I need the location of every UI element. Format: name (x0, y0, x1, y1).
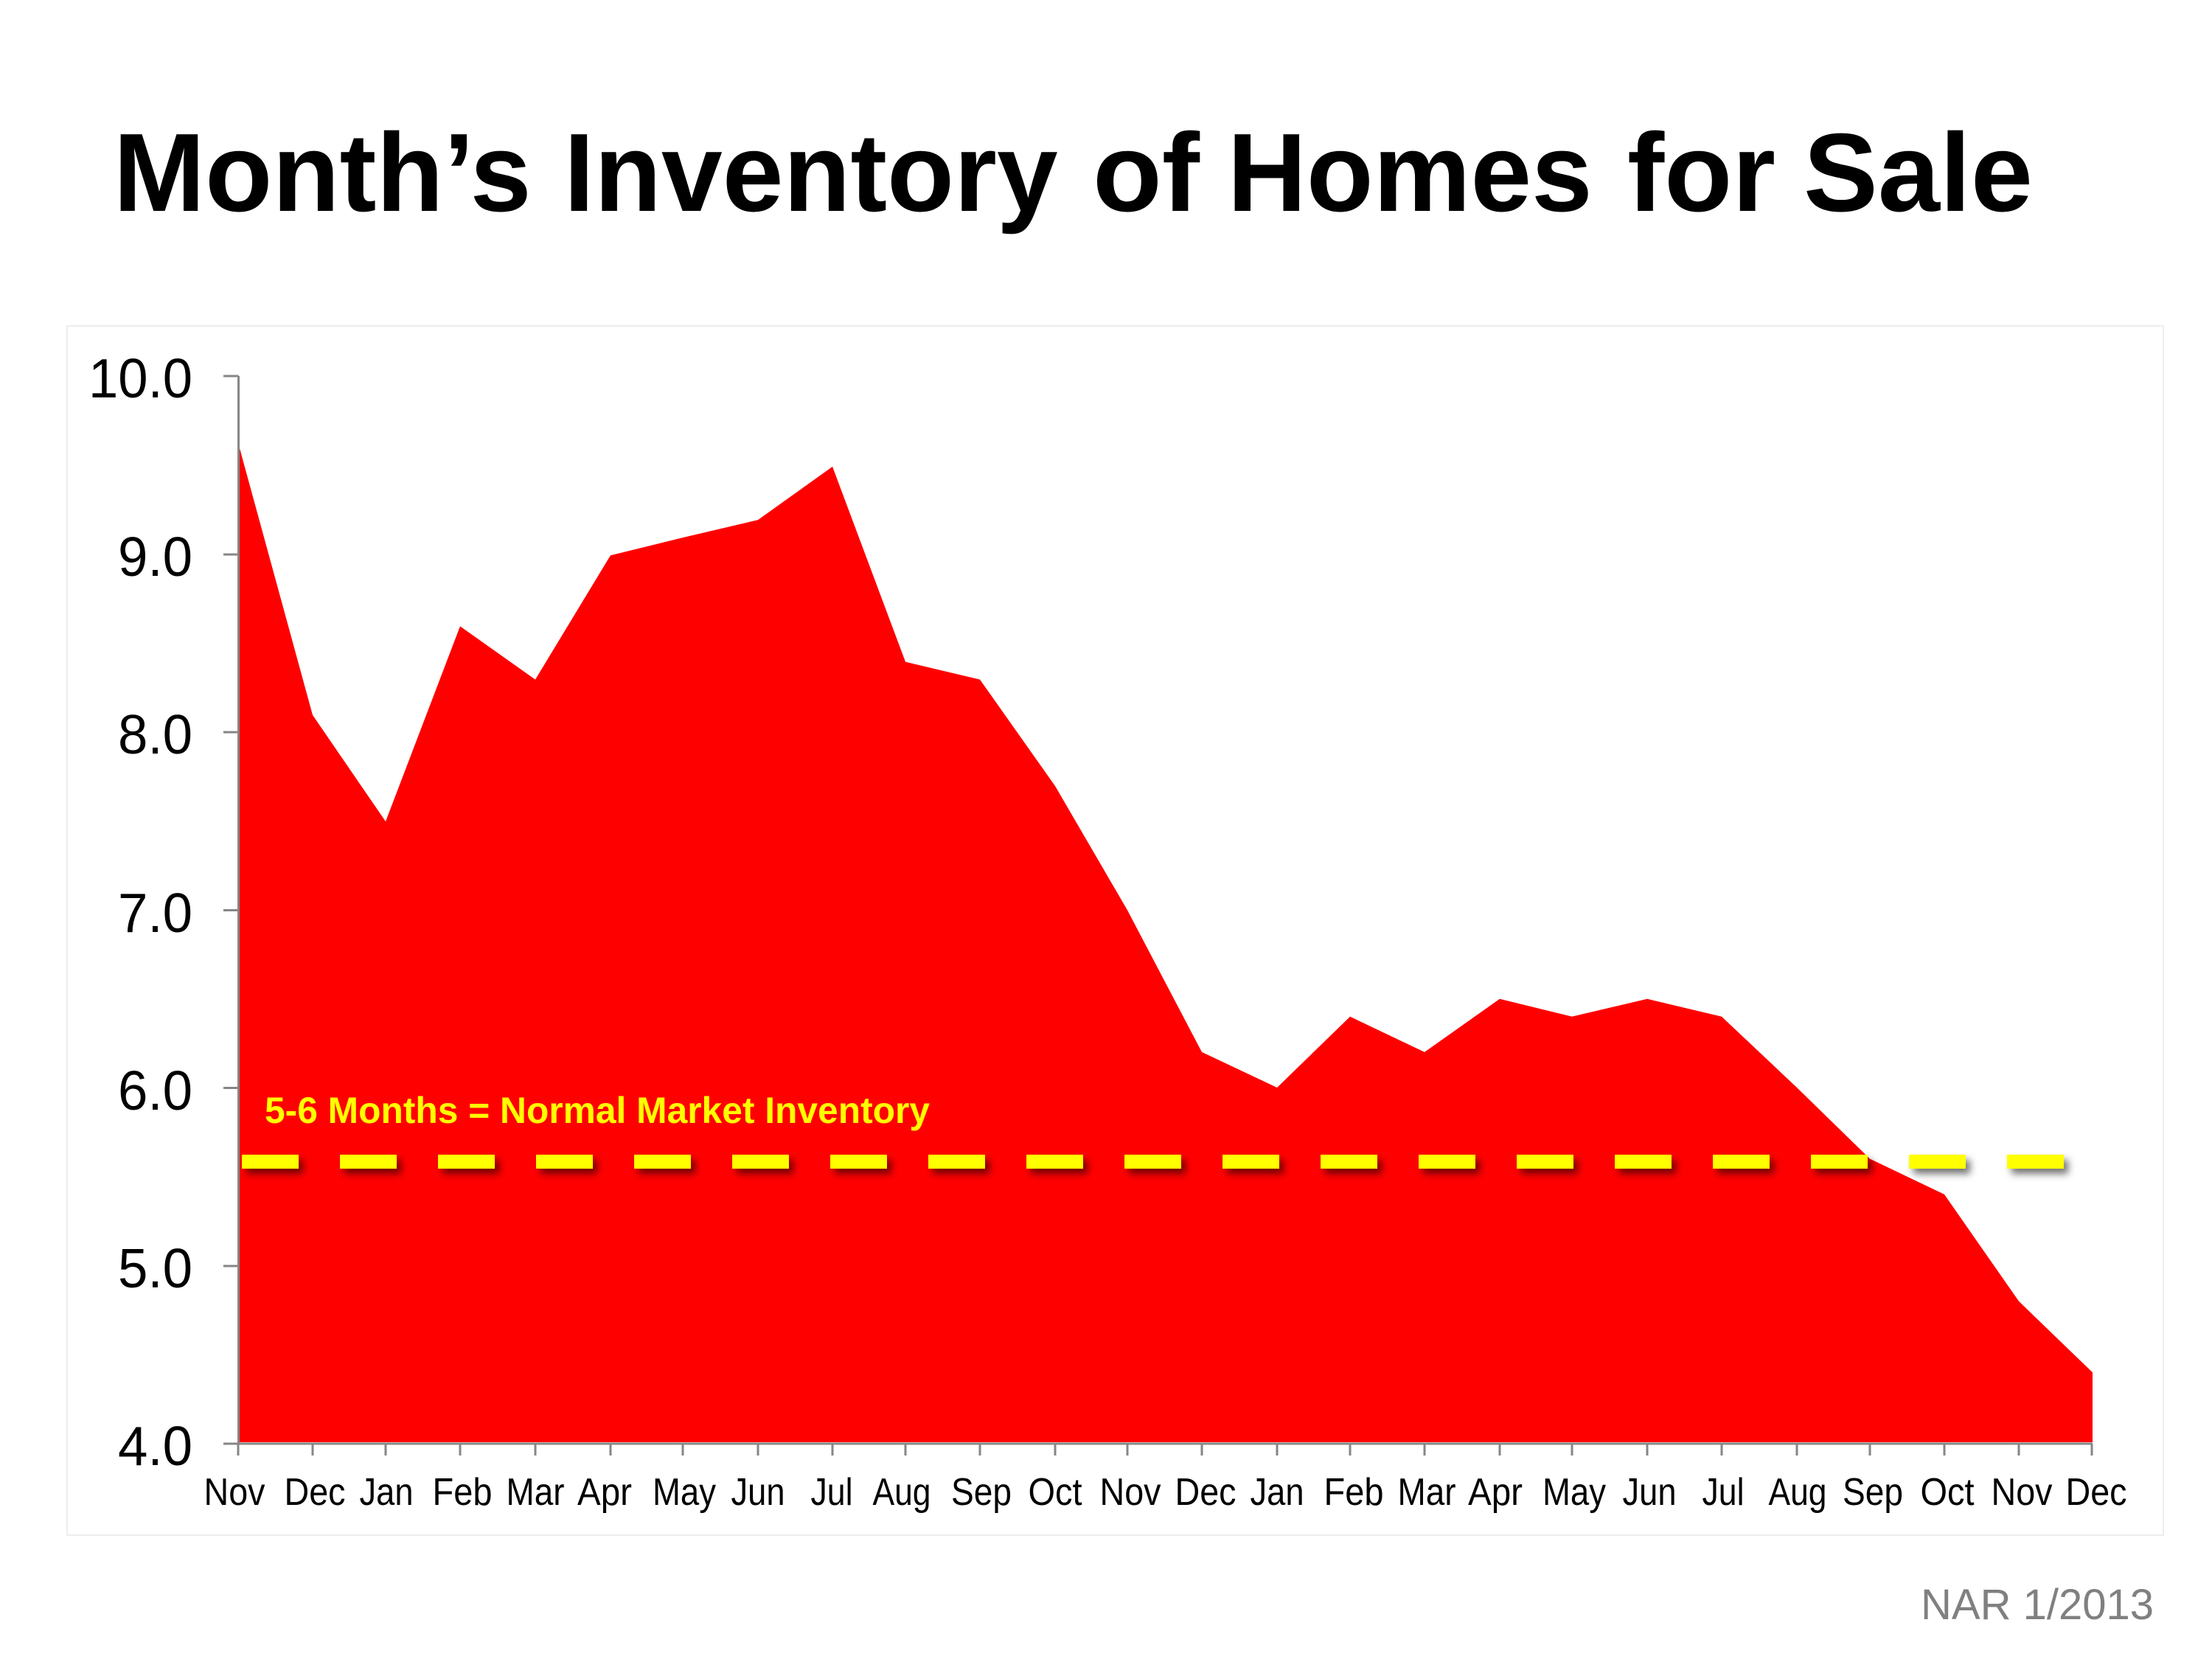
x axis (223, 1444, 2093, 1455)
y axis labels: 5.0 (118, 1237, 192, 1299)
callout: normal market inventory: 5-6 Months = Normal Market Inventory (265, 1090, 930, 1131)
x axis labels: Feb (1324, 1471, 1383, 1514)
x axis labels: Jan (1251, 1471, 1304, 1514)
x axis labels: May (1543, 1471, 1606, 1514)
title (114, 110, 2033, 234)
y axis (223, 376, 239, 1444)
x axis labels: Nov (1100, 1471, 1161, 1514)
x axis labels: Dec (1175, 1471, 1236, 1514)
x axis labels: Oct (1028, 1471, 1082, 1514)
y axis labels: 7.0 (118, 882, 192, 944)
panel: chart frame (67, 326, 2163, 1535)
dashed reference line (242, 1155, 2064, 1169)
x axis labels: Apr (577, 1471, 632, 1514)
y axis labels: 4.0 (118, 1415, 192, 1477)
x axis labels: Aug (873, 1471, 931, 1514)
y axis labels: 10.0 (88, 347, 192, 409)
x axis labels: Dec (285, 1471, 345, 1514)
y axis labels: 9.0 (118, 526, 192, 588)
title: Month’s (114, 110, 532, 234)
x axis labels: Mar (1398, 1471, 1455, 1514)
source note: NAR 1/2013 (1921, 1581, 2154, 1629)
y axis labels: 8.0 (118, 703, 192, 765)
x axis labels: Oct (1920, 1471, 1975, 1514)
x axis labels: Feb (432, 1471, 493, 1514)
x axis labels: Apr (1468, 1471, 1523, 1514)
y axis labels (88, 347, 192, 1477)
y axis labels: 6.0 (118, 1060, 192, 1121)
x axis labels: Jan (360, 1471, 413, 1514)
x axis labels: Jul (811, 1471, 852, 1514)
x axis labels: Aug (1768, 1471, 1827, 1514)
title: for (1627, 110, 1775, 234)
title: of (1093, 110, 1200, 234)
area chart: months of inventory (240, 448, 2093, 1442)
title: Inventory (564, 110, 1058, 234)
x axis labels: Sep (951, 1471, 1012, 1514)
x axis labels (204, 1471, 2126, 1514)
x axis labels: Jul (1702, 1471, 1745, 1514)
title: Homes (1228, 110, 1593, 234)
x axis labels: Nov (1991, 1471, 2053, 1514)
x axis labels: Dec (2066, 1471, 2126, 1514)
title: Sale (1804, 110, 2033, 234)
x axis labels: Jun (731, 1471, 785, 1514)
x axis labels: May (653, 1471, 716, 1514)
x axis labels: Sep (1843, 1471, 1903, 1514)
x axis labels: Mar (506, 1471, 565, 1514)
x axis labels: Nov (204, 1471, 265, 1514)
x axis labels: Jun (1622, 1471, 1677, 1514)
